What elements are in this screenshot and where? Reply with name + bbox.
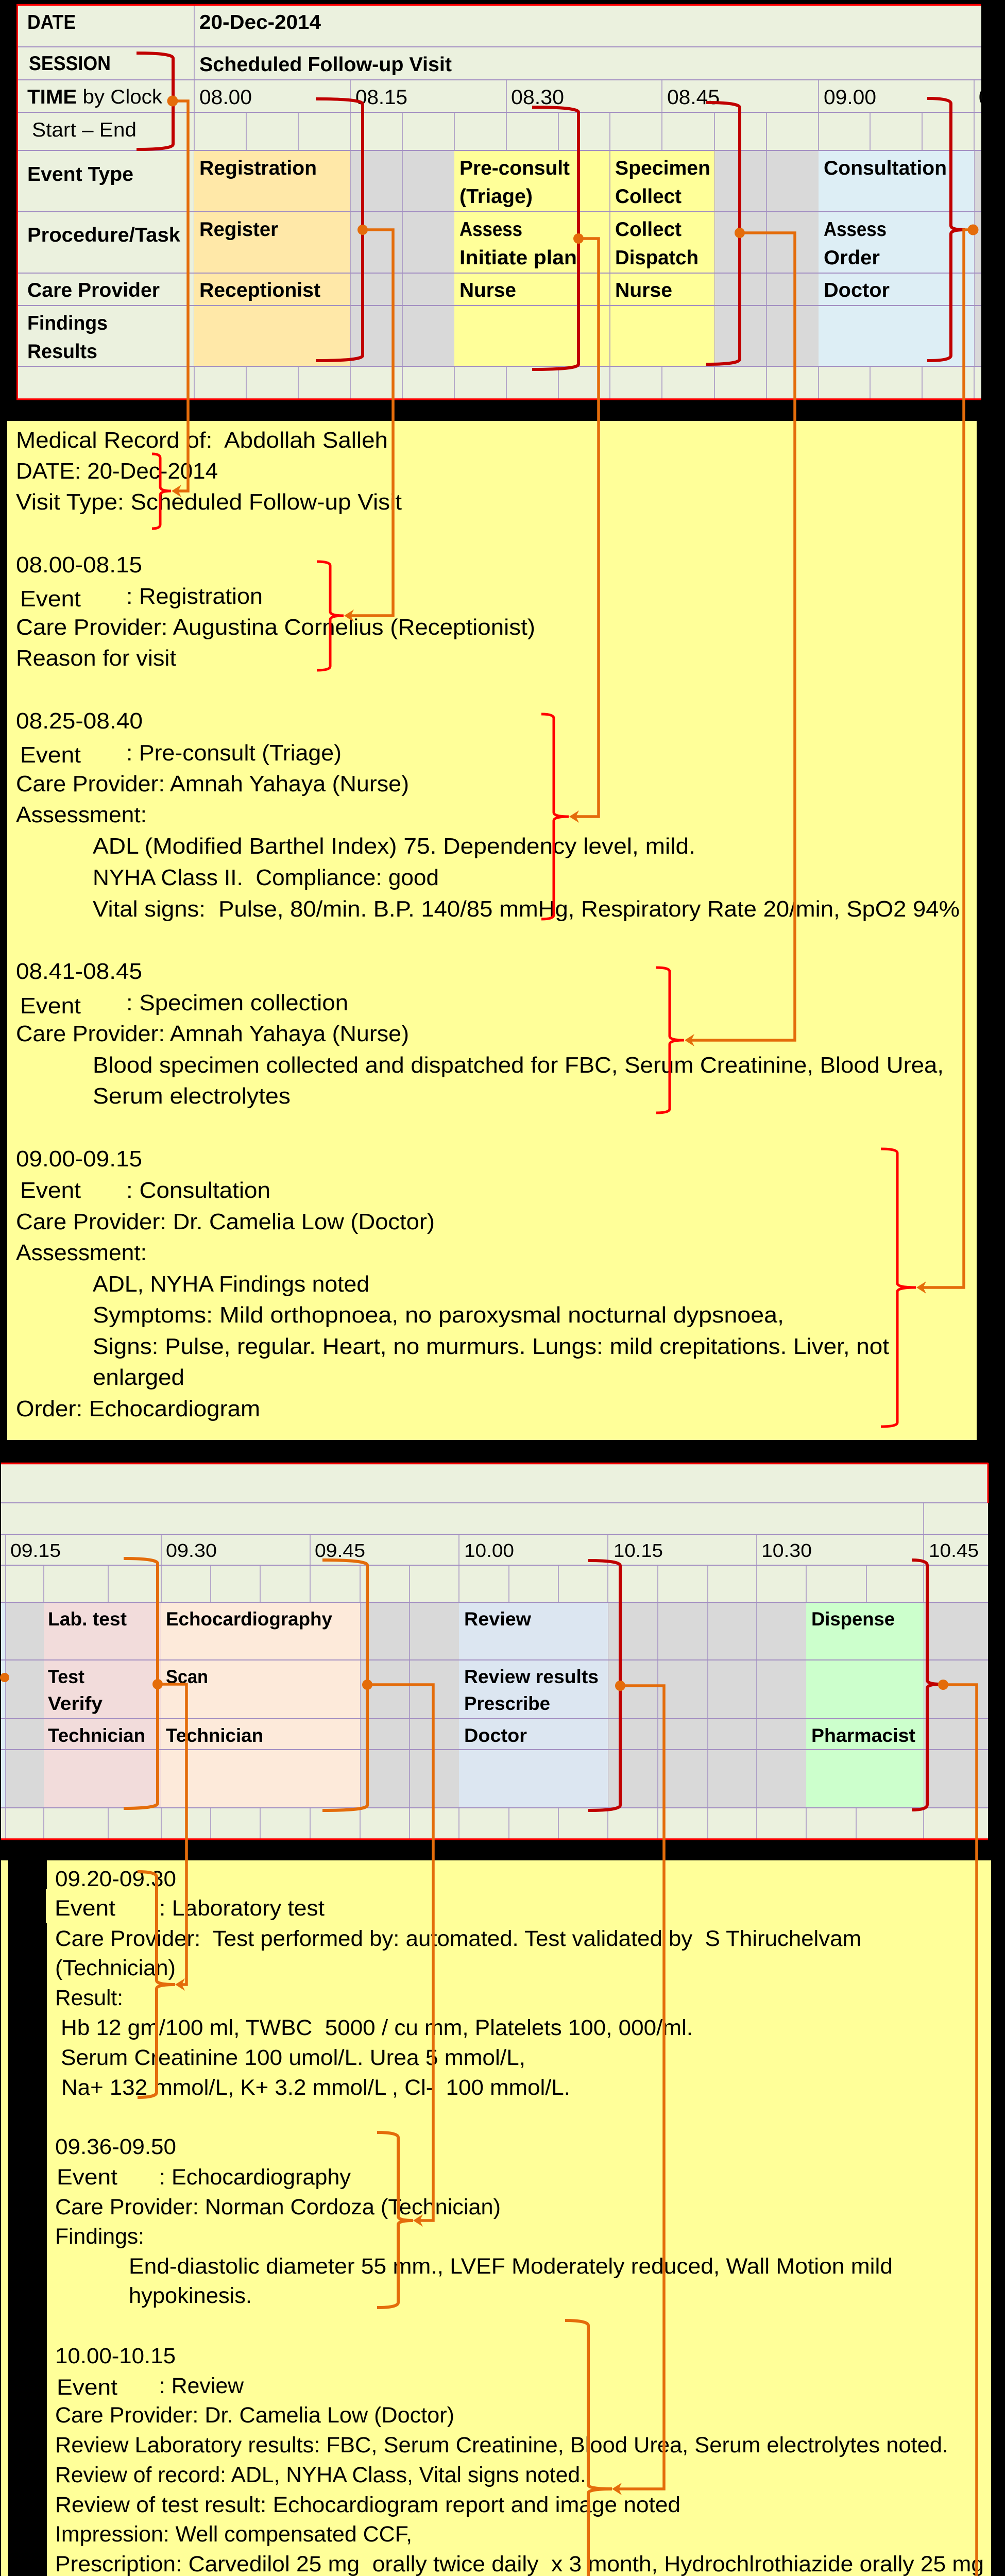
entry: laboratory test: Care Provider: Test performed by: automated. Test validated by S Thiruchelvam xyxy=(55,1926,861,1951)
entry: registration: Event xyxy=(20,586,81,612)
review text: Review xyxy=(464,1608,531,1630)
entry: echocardiography xyxy=(55,2134,893,2308)
entry: consultation: Order: Echocardiogram xyxy=(16,1396,260,1421)
time axis labels: 10.00 xyxy=(464,1540,514,1561)
time axis labels: 08.30 xyxy=(511,86,564,109)
entry: registration: Reason for visit xyxy=(16,646,176,671)
connector: registration to record entry xyxy=(316,99,393,670)
entry: specimen collection: : Specimen collection xyxy=(126,990,348,1015)
review text: Review results xyxy=(464,1666,599,1687)
entry: pre-consult: 08.25-08.40 xyxy=(16,708,143,734)
entry: consultation: Event xyxy=(20,1178,81,1203)
specimen text: Nurse xyxy=(615,279,672,301)
row labels: DATE xyxy=(27,11,76,33)
registration text: Receptionist xyxy=(199,279,320,301)
time axis labels: 09.00 xyxy=(824,86,876,109)
row labels: Care Provider xyxy=(27,279,160,301)
time axis labels: 09.30 xyxy=(166,1540,217,1561)
row labels: Procedure/Task xyxy=(27,224,180,246)
entry: consultation: : Consultation xyxy=(126,1178,270,1203)
entry: consultation: Care Provider: Dr. Camelia Low (Doctor) xyxy=(16,1209,435,1234)
time axis labels: 10.45 xyxy=(929,1540,979,1561)
entry: echocardiography: End-diastolic diameter 55 mm., LVEF Moderately reduced, Wall Motion mild xyxy=(129,2254,893,2279)
lab test text: Test xyxy=(48,1666,84,1687)
entry: laboratory test: Serum Creatinine 100 umol/L. Urea 5 mmol/L, xyxy=(61,2045,525,2070)
entry: pre-consult xyxy=(16,708,960,922)
panel: medical record part 2 xyxy=(46,1860,991,2576)
dispense text: Dispense xyxy=(811,1608,895,1630)
triage text: (Triage) xyxy=(459,185,533,208)
panel: timeline table part 2 xyxy=(1,1463,988,1839)
entry: laboratory test: Na+ 132 mmol/L, K+ 3.2 mmol/L , Cl- 100 mmol/L. xyxy=(61,2075,570,2100)
consultation text: Assess xyxy=(824,218,887,241)
time axis labels: 09.45 xyxy=(315,1540,365,1561)
time axis labels: 08.00 xyxy=(199,86,252,109)
specimen text: Collect xyxy=(615,218,682,241)
registration text xyxy=(199,157,320,301)
review text xyxy=(464,1608,599,1746)
entry: pre-consult: Care Provider: Amnah Yahaya (Nurse) xyxy=(16,771,409,796)
event block: dispense xyxy=(806,1602,924,1808)
consultation text: Consultation xyxy=(824,157,947,179)
event block: registration xyxy=(194,150,350,366)
entry: specimen collection: Care Provider: Amnah Yahaya (Nurse) xyxy=(16,1021,409,1046)
lab test text: Technician xyxy=(48,1725,145,1746)
entry: consultation: Signs: Pulse, regular. Heart, no murmurs. Lungs: mild crepitations. Liver, not xyxy=(93,1334,889,1359)
entry: registration: 08.00-08.15 xyxy=(16,552,142,578)
row labels: SESSION xyxy=(29,53,111,75)
record header: Visit Type: Scheduled Follow-up Visit xyxy=(16,489,402,515)
row labels: Start – End xyxy=(32,119,137,141)
panel: medical record part 1 xyxy=(7,421,977,1440)
entry: review: Review of record: ADL, NYHA Class, Vital signs noted. xyxy=(55,2463,586,2487)
connector: session to record header xyxy=(137,53,188,529)
connector: echocardiography to record entry xyxy=(322,1560,433,2308)
triage text: Nurse xyxy=(459,279,516,301)
entry: specimen collection: Event xyxy=(20,993,81,1019)
row labels: TIME by Clock xyxy=(27,86,163,108)
registration text: Registration xyxy=(199,157,317,179)
time axis labels: 08.45 xyxy=(667,86,720,109)
consultation text xyxy=(824,157,947,301)
entry: laboratory test: (Technician) xyxy=(55,1956,176,1980)
entry: review: Impression: Well compensated CCF, xyxy=(55,2522,412,2547)
session details: 20-Dec-2014 xyxy=(199,11,321,33)
time axis labels: 0 xyxy=(979,86,989,109)
specimen text: Collect xyxy=(615,185,682,208)
triage text: Pre-consult xyxy=(459,157,570,179)
specimen text xyxy=(615,157,710,301)
entry: specimen collection: Blood specimen collected and dispatched for FBC, Serum Creatinine, Blood Urea, xyxy=(93,1053,944,1078)
time axis labels: 10.15 xyxy=(614,1540,663,1561)
entry: registration: : Registration xyxy=(126,584,263,609)
event block: triage and specimen xyxy=(454,150,714,366)
triage text xyxy=(459,157,577,301)
entry: echocardiography: Findings: xyxy=(55,2224,144,2249)
entry: consultation: enlarged xyxy=(93,1365,184,1390)
record header xyxy=(16,428,402,515)
triage text: Assess xyxy=(459,218,522,241)
entry: consultation: Assessment: xyxy=(16,1240,147,1265)
entry: review: Review of test result: Echocardiogram report and image noted xyxy=(55,2493,680,2517)
entry: pre-consult: NYHA Class II. Compliance: good xyxy=(93,865,439,890)
connector: consultation to record entry xyxy=(0,98,979,1682)
entry: specimen collection: 08.41-08.45 xyxy=(16,959,142,984)
time axis labels: 09.15 xyxy=(10,1540,61,1561)
entry: consultation: Symptoms: Mild orthopnoea, no paroxysmal nocturnal dypsnoea, xyxy=(93,1302,784,1328)
row labels: Findings xyxy=(27,312,108,334)
connector: triage to record entry xyxy=(532,107,599,919)
record header: Medical Record of: Abdollah Salleh xyxy=(16,428,388,453)
dispense text: Pharmacist xyxy=(811,1725,915,1746)
entry: laboratory test xyxy=(55,1867,861,2100)
echocardiography text xyxy=(166,1608,332,1746)
entry: laboratory test: 09.20-09.30 xyxy=(55,1867,176,1891)
lab test text: Verify xyxy=(48,1693,103,1714)
entry: echocardiography: Care Provider: Norman Cordoza (Technician) xyxy=(55,2195,501,2219)
entry: registration: Care Provider: Augustina Cornelius (Receptionist) xyxy=(16,615,535,640)
connector: lab test to record entry xyxy=(124,1558,186,2097)
entry: review: Care Provider: Dr. Camelia Low (Doctor) xyxy=(55,2403,454,2428)
entry: consultation xyxy=(16,1146,889,1421)
event block: review xyxy=(459,1602,608,1808)
entry: echocardiography: hypokinesis. xyxy=(129,2283,252,2308)
entry: review: Review Laboratory results: FBC, Serum Creatinine, Blood Urea, Serum electrolytes noted. xyxy=(55,2433,948,2458)
entry: laboratory test: : Laboratory test xyxy=(159,1896,325,1921)
consultation text: Order xyxy=(824,247,880,269)
left edge strip xyxy=(1,1860,8,2576)
entry: laboratory test: Result: xyxy=(55,1986,123,2010)
connector: dispense to record entry xyxy=(912,1560,977,2576)
entry: echocardiography: 09.36-09.50 xyxy=(55,2134,176,2159)
echocardiography text: Technician xyxy=(166,1725,263,1746)
specimen text: Specimen xyxy=(615,157,710,179)
review text: Prescribe xyxy=(464,1693,550,1714)
time axis labels: 08.15 xyxy=(355,86,407,109)
entry: laboratory test: Hb 12 gm/100 ml, TWBC 5000 / cu mm, Platelets 100, 000/ml. xyxy=(61,2015,693,2040)
entry: review: Event xyxy=(57,2375,117,2400)
echocardiography text: Scan xyxy=(166,1666,208,1687)
session details: Scheduled Follow-up Visit xyxy=(199,54,452,76)
consultation text: Doctor xyxy=(824,279,890,301)
dispense text xyxy=(811,1608,915,1746)
row labels: Results xyxy=(27,341,97,363)
panel: timeline table part 1 xyxy=(16,0,1005,412)
event block: lab test xyxy=(44,1602,161,1808)
time axis labels xyxy=(10,1540,979,1561)
entry: pre-consult: ADL (Modified Barthel Index) 75. Dependency level, mild. xyxy=(93,834,695,859)
event block: echocardiography xyxy=(161,1602,360,1808)
entry: specimen collection: Serum electrolytes xyxy=(93,1083,291,1109)
entry: echocardiography: : Echocardiography xyxy=(159,2165,351,2190)
review text: Doctor xyxy=(464,1725,527,1746)
session details xyxy=(199,11,452,76)
entry: consultation: 09.00-09.15 xyxy=(16,1146,142,1172)
connector: specimen to record entry xyxy=(656,103,795,1113)
time axis labels: 10.30 xyxy=(761,1540,812,1561)
time axis labels xyxy=(199,86,989,109)
entry: specimen collection xyxy=(16,959,944,1109)
row labels xyxy=(27,11,180,363)
entry: registration xyxy=(16,552,535,671)
entry: pre-consult: Vital signs: Pulse, 80/min. B.P. 140/85 mmHg, Respiratory Rate 20/min, SpO2 94% xyxy=(93,896,960,922)
connector: review to record entry xyxy=(565,1561,664,2576)
record header: DATE: 20-Dec-2014 xyxy=(16,459,218,484)
entry: review xyxy=(55,2344,984,2576)
entry: review: : Review xyxy=(159,2374,244,2398)
event block: consultation xyxy=(819,150,974,366)
registration text: Register xyxy=(199,218,278,241)
entry: pre-consult: : Pre-consult (Triage) xyxy=(126,740,342,766)
entry: review: 10.00-10.15 xyxy=(55,2344,176,2368)
entry: laboratory test: Event xyxy=(55,1896,115,1921)
entry: pre-consult: Assessment: xyxy=(16,802,147,827)
row labels: Event Type xyxy=(27,163,133,185)
echocardiography text: Echocardiography xyxy=(166,1608,332,1630)
specimen text: Dispatch xyxy=(615,247,699,269)
entry: consultation: ADL, NYHA Findings noted xyxy=(93,1272,369,1297)
lab test text xyxy=(48,1608,145,1746)
entry: pre-consult: Event xyxy=(20,742,81,768)
triage text: Initiate plan xyxy=(459,247,577,269)
entry: echocardiography: Event xyxy=(57,2165,117,2190)
lab test text: Lab. test xyxy=(48,1608,127,1630)
entry: review: Prescription: Carvedilol 25 mg orally twice daily x 3 month, Hydrochlrothiazide orally 25 mg xyxy=(55,2552,984,2576)
